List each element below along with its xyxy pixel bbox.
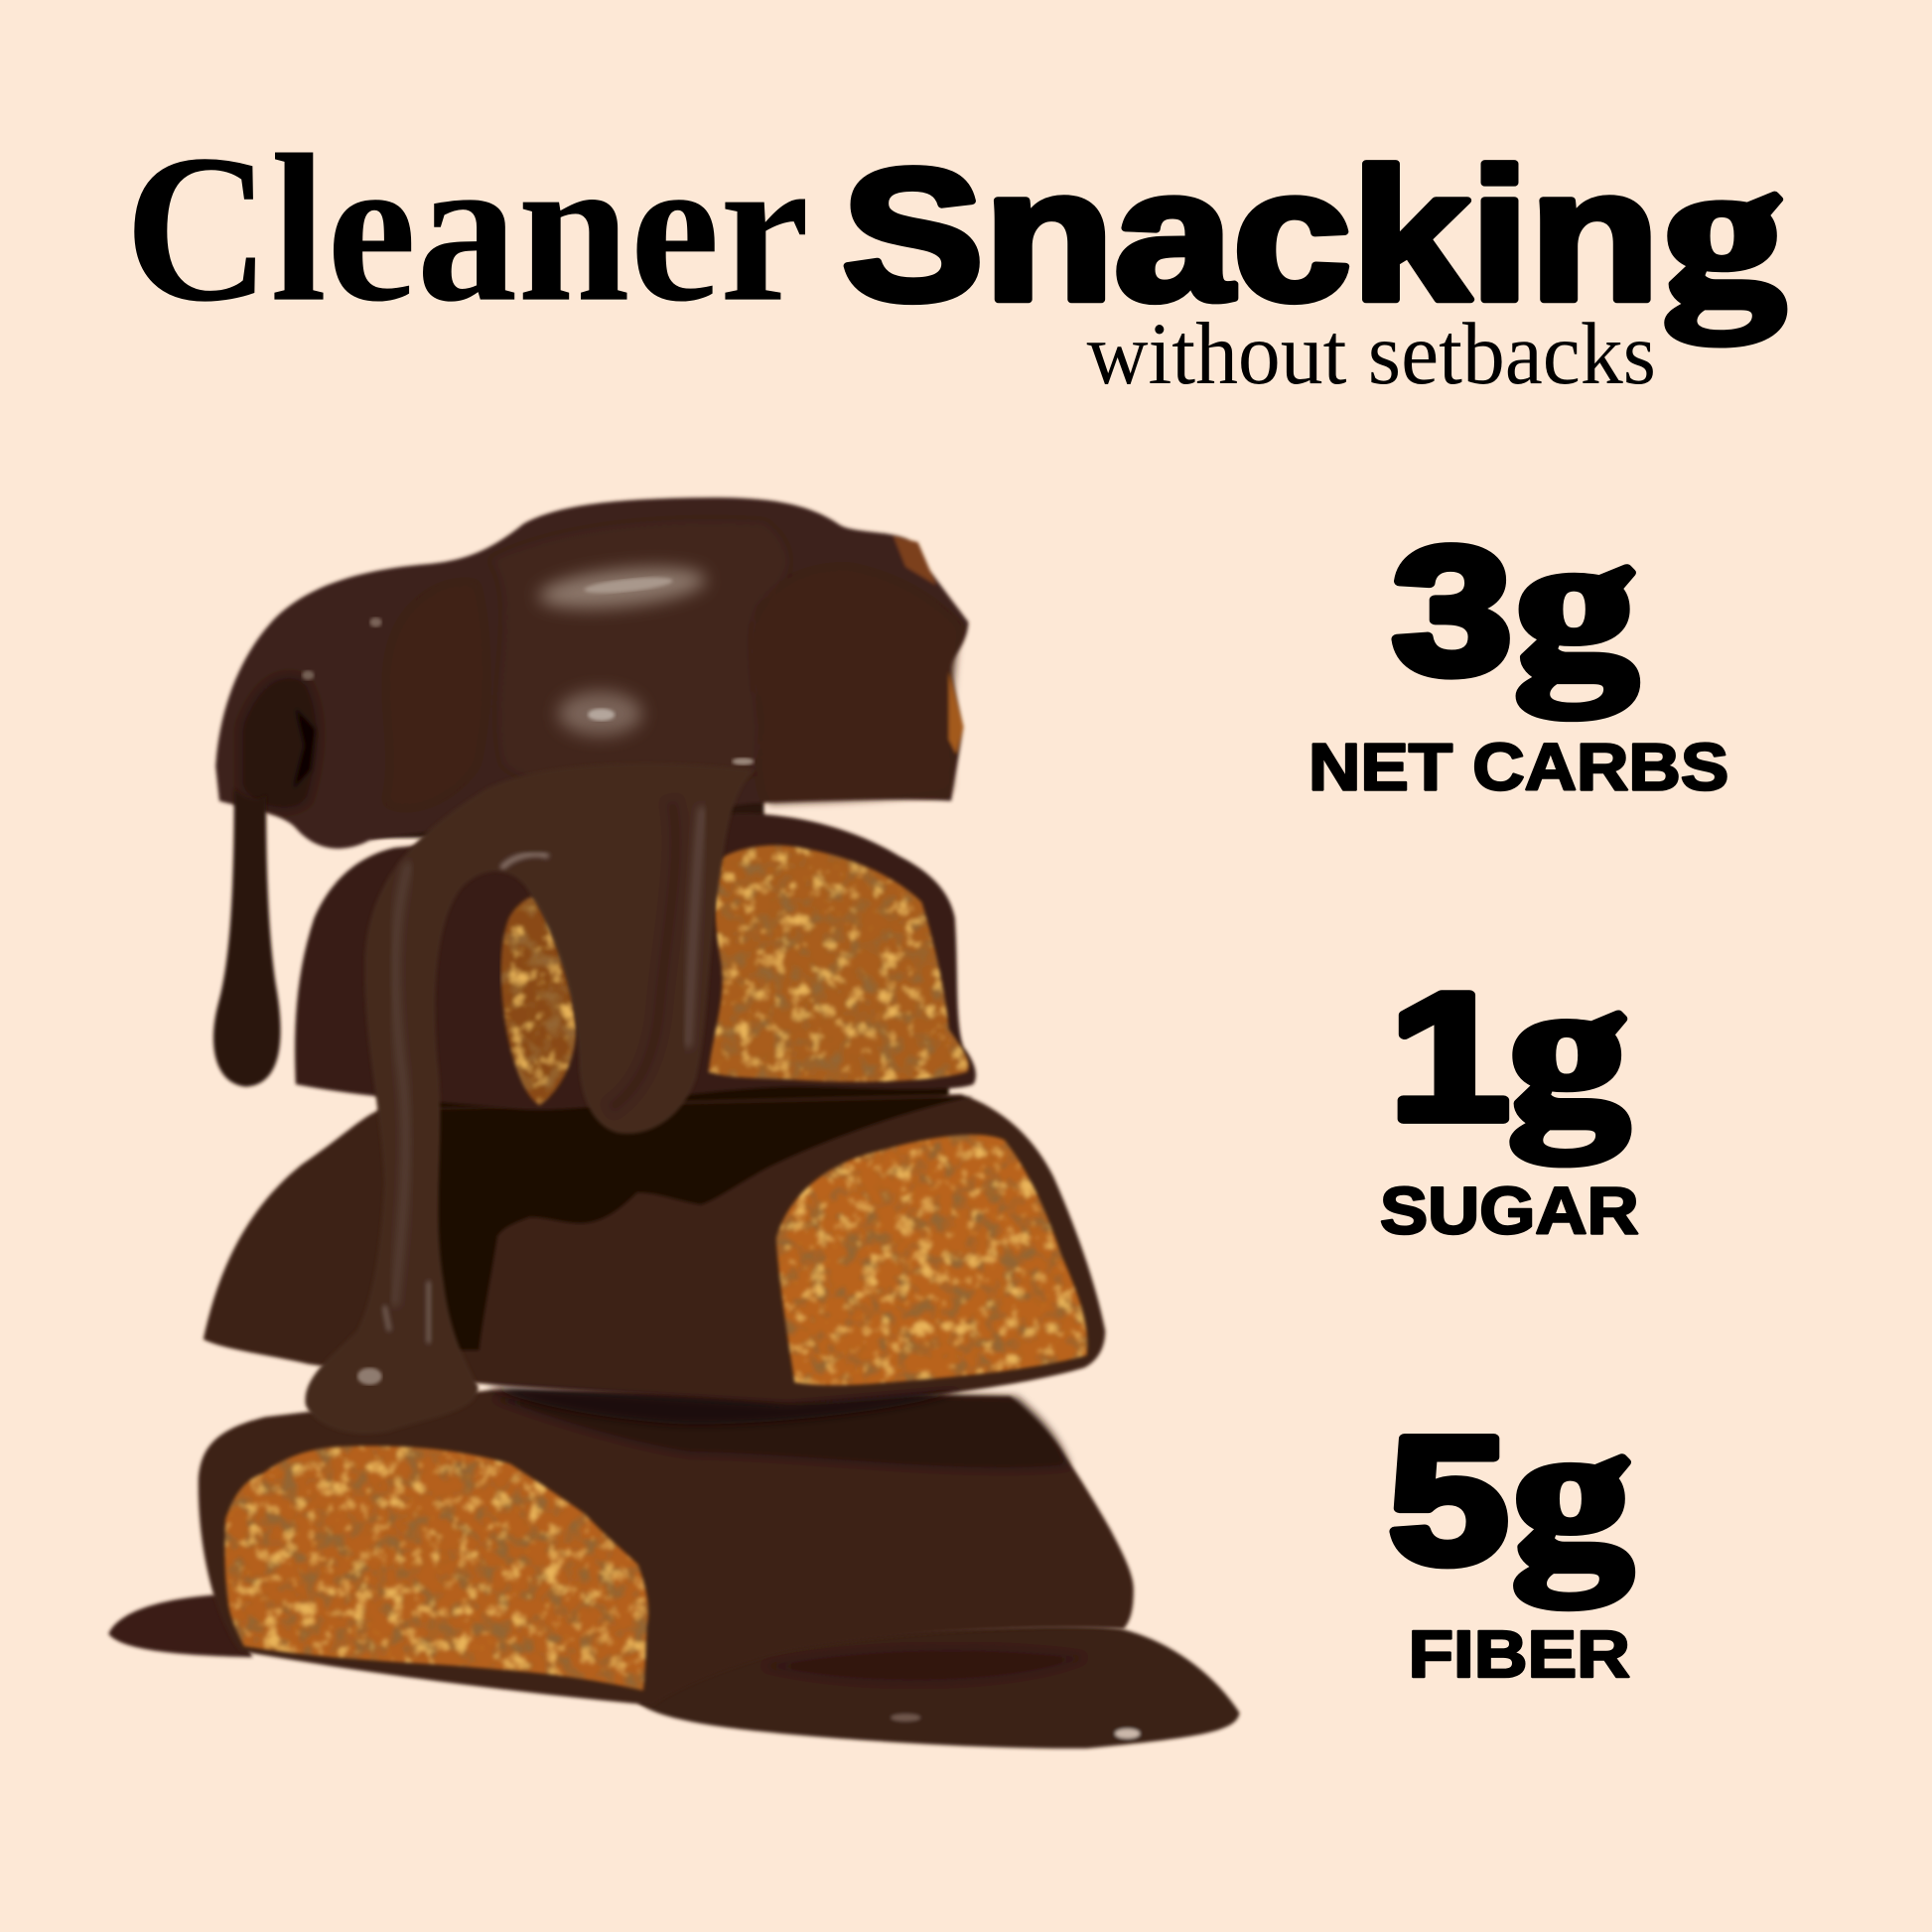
stat: 1g sugar [1380, 939, 1639, 1248]
title [124, 112, 1785, 403]
label: sugar: SUGAR [1380, 1173, 1639, 1248]
label: net carbs: NET CARBS [1309, 731, 1728, 805]
subtitle: without setbacks [1087, 305, 1656, 403]
value: 1g: g [1508, 939, 1629, 1164]
title word: Cleaner: Cleaner [124, 112, 809, 346]
title word: Snacking: g [1662, 120, 1785, 345]
value: 1g: 1 [1390, 957, 1509, 1158]
shadow fill between bars 2 and 3 [419, 1072, 949, 1128]
bar 2 side filling [501, 896, 577, 1105]
value: 1g [1390, 939, 1629, 1164]
bar 3 [204, 1094, 1105, 1425]
value: 5g: g [1512, 1383, 1632, 1607]
chocolate puddle [108, 1594, 1240, 1748]
illustration: stack of chocolate bars [108, 497, 1240, 1748]
value: 5g [1389, 1383, 1632, 1607]
value: 3g: g [1514, 493, 1637, 718]
value: 3g [1392, 493, 1637, 718]
bar 2 filling [709, 845, 969, 1082]
label: fiber: FIBER [1409, 1617, 1630, 1692]
chocolate highlights [302, 561, 755, 1385]
shadow fill between bars 1 and 2 [369, 788, 763, 838]
bar 2 [295, 813, 976, 1110]
bar 1 top [215, 497, 968, 849]
value: 5g: 5 [1389, 1401, 1508, 1601]
stat: 3g net carbs [1309, 493, 1728, 805]
left drip [213, 788, 281, 1087]
bar 4 bottom [199, 1390, 1134, 1706]
title word: Snacking: Snackin [842, 130, 1660, 340]
main chocolate drizzle [305, 763, 755, 1434]
bar 3 filling [776, 1135, 1087, 1385]
value: 3g: 3 [1392, 511, 1512, 712]
stat: 5g fiber [1389, 1383, 1632, 1692]
bar 4 filling [224, 1446, 648, 1691]
